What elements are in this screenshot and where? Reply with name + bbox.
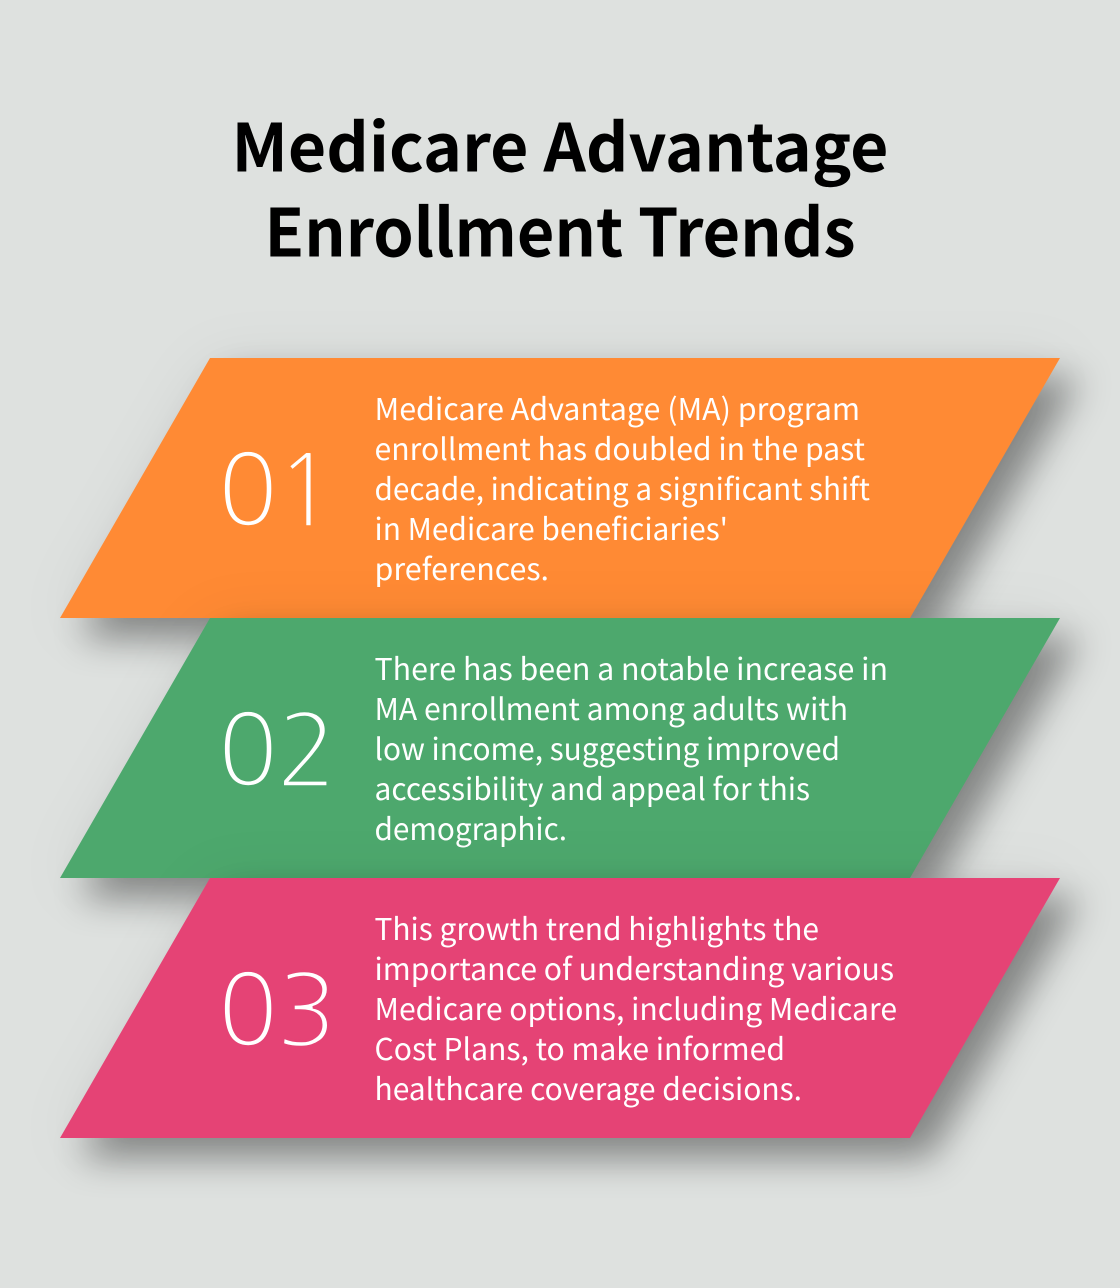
text block: step 01: in Medicare beneficiaries' (374, 505, 728, 549)
number 03: 03 (218, 961, 337, 1061)
panel: step 02 (60, 618, 1060, 878)
text block: step 01: Medicare Advantage (MA) program (374, 385, 860, 429)
title: Enrollment Trends (264, 180, 856, 276)
title (232, 96, 888, 276)
text block: step 02: demographic. (374, 805, 567, 849)
text block: step 02 (374, 645, 888, 849)
text block: step 02: MA enrollment among adults with (374, 685, 848, 729)
number 01: 01 (218, 441, 336, 541)
text block: step 02: There has been a notable increase in (374, 645, 888, 689)
panel: step 03 (60, 878, 1060, 1138)
text block: step 01: preferences. (374, 545, 549, 589)
text block: step 03 (374, 905, 897, 1109)
text block: step 03: Cost Plans, to make informed (374, 1025, 785, 1069)
text block: step 02: low income, suggesting improved (374, 725, 840, 769)
panel: step 01 (60, 358, 1060, 618)
text block: step 03: healthcare coverage decisions. (374, 1065, 802, 1109)
panel shape: orange parallelogram (60, 358, 1060, 618)
panel shape: green parallelogram (60, 618, 1060, 878)
title: Medicare Advantage (232, 96, 888, 192)
panel shape: pink parallelogram (60, 878, 1060, 1138)
number 02: 02 (218, 701, 337, 801)
text block: step 03: This growth trend highlights the (374, 905, 819, 949)
text block: step 03: importance of understanding various (374, 945, 894, 989)
text block: step 01: decade, indicating a significant shift (374, 465, 870, 509)
text block: step 02: accessibility and appeal for this (374, 765, 810, 809)
text block: step 03: Medicare options, including Medicare (374, 985, 897, 1029)
text block: step 01: enrollment has doubled in the past (374, 425, 865, 469)
text block: step 01 (374, 385, 870, 589)
